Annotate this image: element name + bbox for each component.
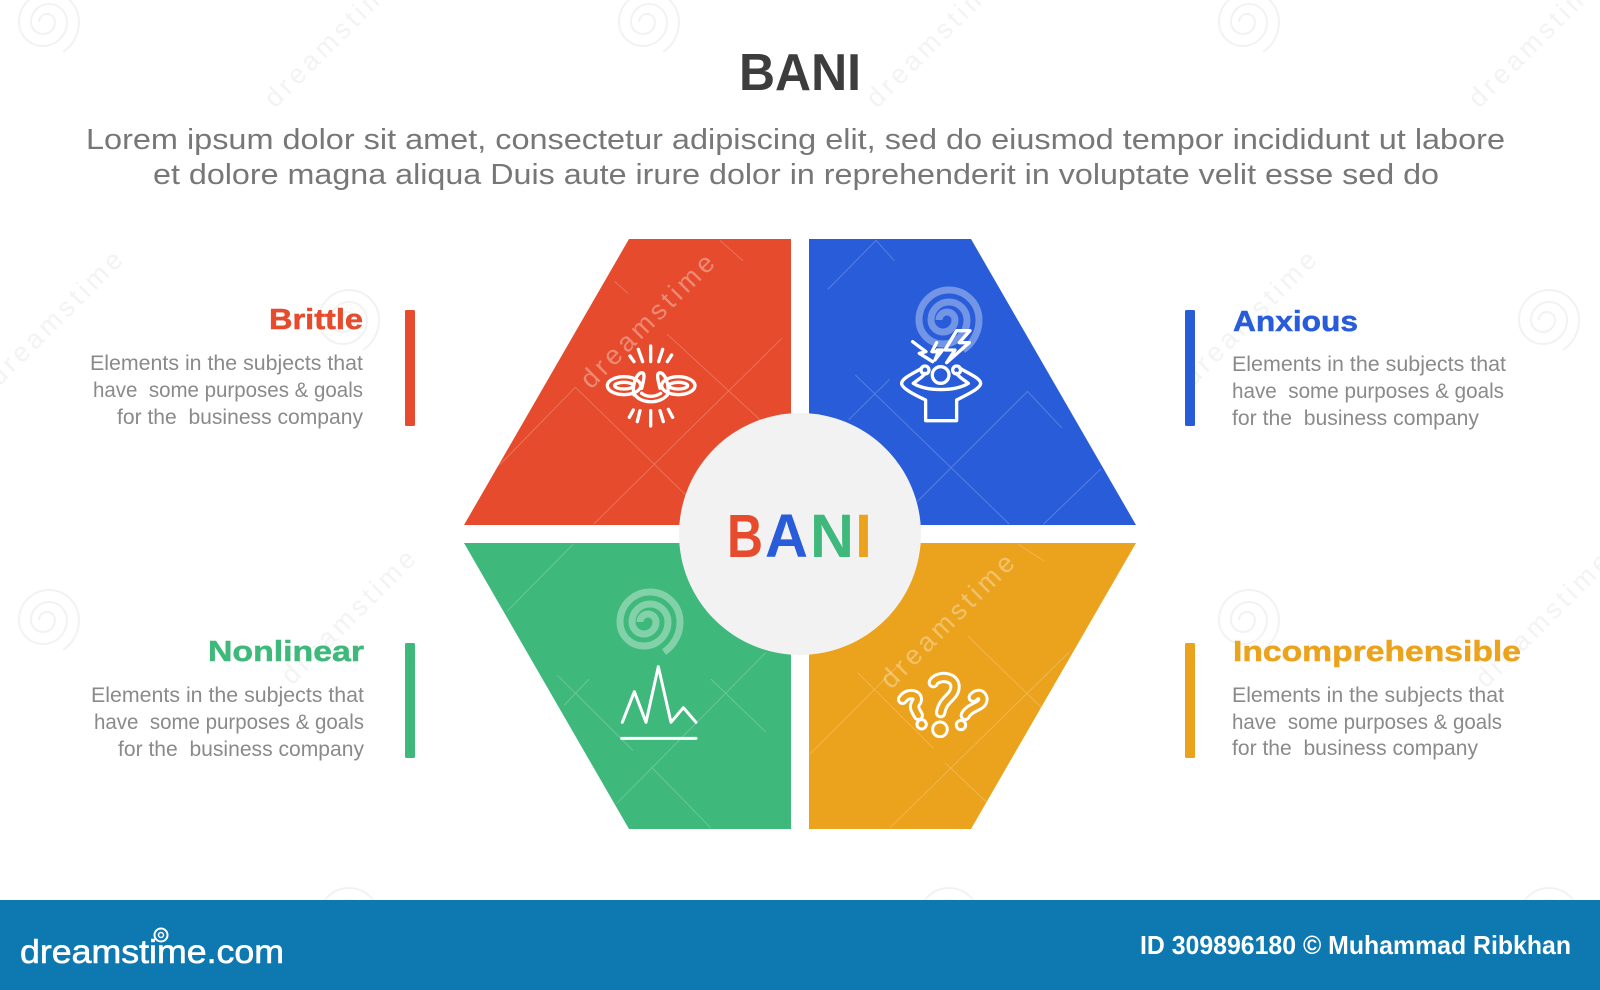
- text block: Brittle description: [90, 352, 363, 429]
- text block: Nonlinear description: for the business company: [118, 738, 364, 761]
- panel: anxious segment: [809, 239, 1136, 525]
- text block: Incomprehensible description: for the business company: [1232, 737, 1478, 760]
- hexagon diagram: [464, 239, 1136, 829]
- center label BANI: N: [810, 502, 854, 570]
- center label BANI: [727, 502, 872, 570]
- text block: Nonlinear description: Elements in the subjects that: [91, 684, 364, 707]
- text block: Incomprehensible description: have some purposes & goals: [1232, 711, 1502, 734]
- accent bar: Brittle: [405, 310, 415, 426]
- icon: question marks: [903, 677, 983, 737]
- subtitle text: et dolore magna aliqua Duis aute irure dolor in reprehenderit in voluptate velit esse sed do: [153, 159, 1439, 191]
- accent bar: Nonlinear: [405, 643, 415, 758]
- subtitle text: Lorem ipsum dolor sit amet, consectetur adipiscing elit, sed do eiusmod tempor incididunt ut labore: [86, 124, 1505, 156]
- hexagon diagram: dreamstime: [874, 545, 1023, 694]
- text block: Anxious description: Elements in the subjects that: [1232, 353, 1506, 376]
- center label BANI: I: [855, 502, 872, 570]
- BANI infographic: dreamstime: [275, 541, 424, 690]
- callout: Nonlinear: [91, 636, 415, 761]
- callout: Brittle: [90, 304, 415, 429]
- panel: incomprehensible segment: [809, 543, 1136, 829]
- text block: Brittle description: Elements in the subjects that: [90, 352, 363, 375]
- footer bar: [0, 900, 1600, 990]
- center label BANI: A: [765, 502, 808, 570]
- text block: Anxious description: have some purposes & goals: [1232, 380, 1504, 403]
- center label BANI: B: [727, 502, 763, 570]
- heading: Brittle: Brittle: [269, 304, 363, 336]
- text block: Anxious description: for the business company: [1232, 407, 1479, 430]
- icon: broken chain: [607, 346, 695, 426]
- panel: brittle segment: [464, 239, 791, 525]
- text block: Brittle description: have some purposes & goals: [93, 379, 363, 402]
- text block: Brittle description: for the business company: [117, 406, 363, 429]
- accent bar: Incomprehensible: [1185, 643, 1195, 758]
- subtitle text: [86, 124, 1505, 191]
- text block: Anxious description: [1232, 353, 1506, 430]
- icon: anxious person: [902, 331, 981, 421]
- callout: Incomprehensible: [1185, 636, 1521, 760]
- text block: Nonlinear description: [91, 684, 364, 761]
- text block: Nonlinear description: have some purposes & goals: [94, 711, 364, 734]
- footer logo: dreamstime.com: [20, 933, 284, 970]
- accent bar: Anxious: [1185, 310, 1195, 426]
- icon: nonlinear chart: [622, 667, 696, 738]
- center circle: [679, 413, 921, 655]
- heading: Anxious: Anxious: [1233, 306, 1358, 338]
- callout: Anxious: [1185, 306, 1506, 430]
- panel: nonlinear segment: [464, 543, 791, 829]
- title: BANI: [739, 44, 861, 102]
- BANI infographic: dreamstime: [1176, 242, 1325, 391]
- text block: Incomprehensible description: [1232, 684, 1504, 760]
- heading: Nonlinear: Nonlinear: [208, 636, 364, 668]
- heading: Incomprehensible: Incomprehensible: [1233, 636, 1521, 668]
- footer credit: ID 309896180 © Muhammad Ribkhan: [1140, 930, 1571, 960]
- hexagon diagram: dreamstime: [574, 245, 723, 394]
- text block: Incomprehensible description: Elements in the subjects that: [1232, 684, 1504, 707]
